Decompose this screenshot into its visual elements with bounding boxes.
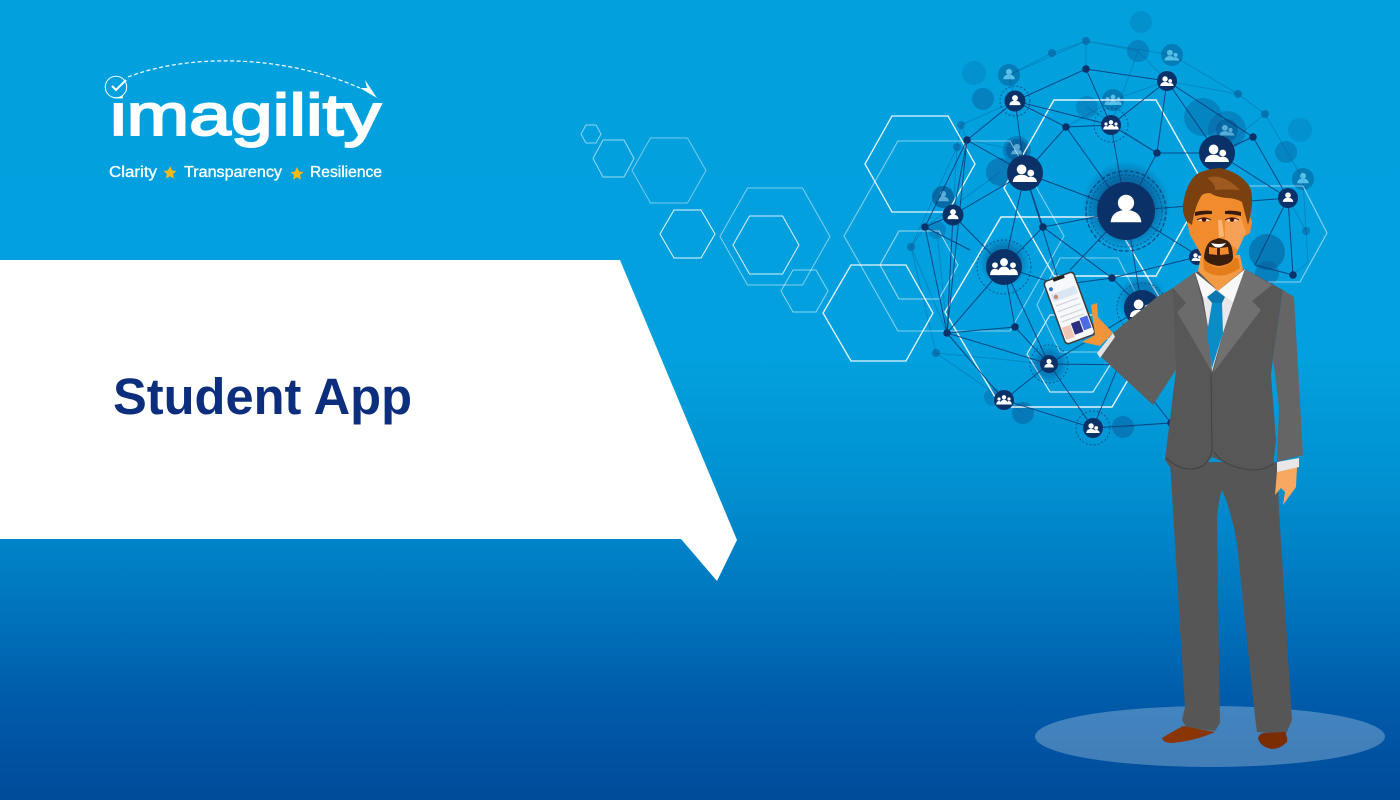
undershirt <box>1203 291 1233 372</box>
businessman illustration <box>1042 168 1303 749</box>
halo glow <box>979 237 1167 383</box>
faint background network <box>907 11 1314 438</box>
hair <box>1183 168 1252 225</box>
logo dashed flight arc <box>128 61 360 88</box>
network junction dots <box>921 65 1297 427</box>
logo check badge <box>105 76 127 98</box>
floating hexagons <box>581 125 830 312</box>
logo tagline: Resilience <box>310 164 382 181</box>
user icon nodes <box>942 71 1298 438</box>
eyes <box>1197 217 1239 222</box>
shoes <box>1162 726 1287 749</box>
ground ellipse <box>1035 706 1385 767</box>
faint user icons <box>932 44 1314 208</box>
right hand <box>1275 467 1297 505</box>
beard <box>1204 238 1233 266</box>
white title banner <box>0 260 737 581</box>
jacket body <box>1165 269 1283 472</box>
shirt collar <box>1195 269 1245 303</box>
large network hexagons <box>823 100 1327 407</box>
left hand <box>1082 303 1113 346</box>
jacket sleeve right <box>1273 290 1303 462</box>
jacket seams <box>1166 373 1273 470</box>
left shirt cuff <box>1097 333 1115 358</box>
logo <box>105 61 382 181</box>
network halos <box>977 86 1167 445</box>
head <box>1183 168 1252 268</box>
logo paper plane <box>360 80 377 98</box>
logo tagline <box>109 164 382 181</box>
title: Student App <box>113 368 412 425</box>
neck <box>1198 255 1243 291</box>
tie <box>1207 290 1225 368</box>
mouth <box>1211 243 1226 248</box>
central user node with halo <box>1082 161 1170 251</box>
eyebrows <box>1195 211 1241 216</box>
right shirt cuff <box>1277 458 1299 472</box>
logo wordmark: imagility <box>110 83 381 148</box>
smartphone <box>1042 270 1097 346</box>
logo tagline: Transparency <box>184 164 282 181</box>
network connection lines <box>925 69 1293 428</box>
logo tagline: Clarity <box>109 164 157 181</box>
trousers <box>1170 462 1292 734</box>
left arm <box>1097 288 1190 405</box>
logo stars <box>164 166 304 180</box>
lapels <box>1173 269 1272 373</box>
neck shadow <box>1203 258 1240 276</box>
